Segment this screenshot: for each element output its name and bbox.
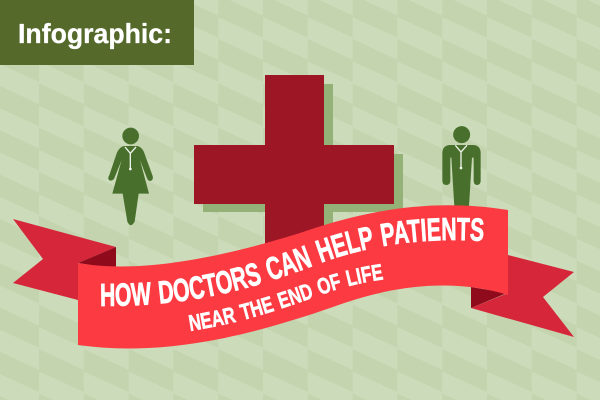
- ribbon headline: HOW DOCTORS CAN HELP PATIENTS: [101, 218, 484, 306]
- ribbon subheading: NEAR THE END OF LIFE: [188, 264, 384, 332]
- title banner: Infographic:: [18, 18, 172, 49]
- icon: male doctor: [442, 126, 481, 212]
- icon: female doctor: [108, 128, 153, 225]
- ribbon: right tail: [471, 255, 574, 337]
- icon: medical cross shadow: [203, 84, 403, 270]
- ribbon: main band: [78, 205, 508, 348]
- ribbon: left tail: [13, 219, 116, 300]
- icon: red medical cross: [194, 75, 394, 270]
- title banner: [0, 0, 194, 65]
